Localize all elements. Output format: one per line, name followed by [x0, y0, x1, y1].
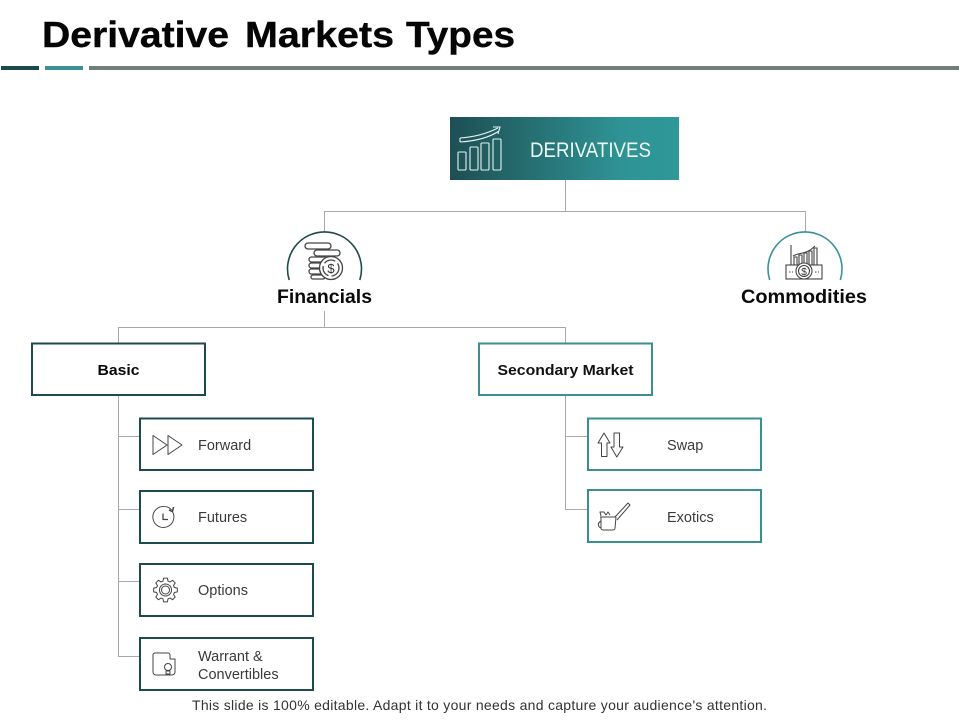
- connector lines: [118, 180, 806, 656]
- node: commodities: [741, 232, 867, 308]
- box: secondary market: Secondary Market: [498, 363, 634, 379]
- title: Types: [406, 14, 515, 55]
- root box: derivatives: [450, 117, 679, 180]
- box: options: Options: [198, 583, 248, 599]
- root label: DERIVATIVES: [530, 139, 651, 162]
- box: futures: [140, 491, 313, 543]
- icon: up and down arrows: [598, 433, 623, 457]
- box: basic: Basic: [98, 362, 140, 379]
- title rule: [1, 66, 959, 70]
- box: exotics: Exotics: [667, 510, 714, 526]
- box: swap: [588, 418, 761, 470]
- box: options: [140, 564, 313, 616]
- box: warrant and convertibles: [140, 638, 313, 690]
- box: swap: Swap: [667, 438, 703, 454]
- title: [42, 14, 515, 55]
- icon: rising bar chart: [458, 127, 501, 170]
- icon: coin stack in arc: $: [327, 261, 335, 276]
- footer note: This slide is 100% editable. Adapt it to your needs and capture your audience's attention.: [192, 697, 767, 713]
- commodities label: Commodities: [741, 287, 867, 308]
- box: forward: Forward: [198, 438, 251, 454]
- icon: fast forward: [153, 436, 182, 454]
- icon: document with bulb: [153, 653, 175, 675]
- title: Derivative: [42, 14, 229, 55]
- box: futures: Futures: [198, 510, 247, 526]
- box: warrant and convertibles: Convertibles: [198, 667, 279, 683]
- box: basic: [32, 344, 205, 395]
- icon: clock refresh: [153, 506, 174, 527]
- box: exotics: [588, 490, 761, 542]
- box: warrant and convertibles: Warrant &: [198, 649, 263, 665]
- icon: pot with handle: [598, 503, 630, 530]
- title: Markets: [245, 14, 394, 55]
- node: financials: [277, 232, 372, 308]
- financials label: Financials: [277, 287, 372, 308]
- box: secondary market: [479, 344, 652, 395]
- box: forward: [140, 418, 313, 470]
- icon: gear: [154, 578, 177, 602]
- icon: chart over banknote in arc: $: [801, 267, 807, 278]
